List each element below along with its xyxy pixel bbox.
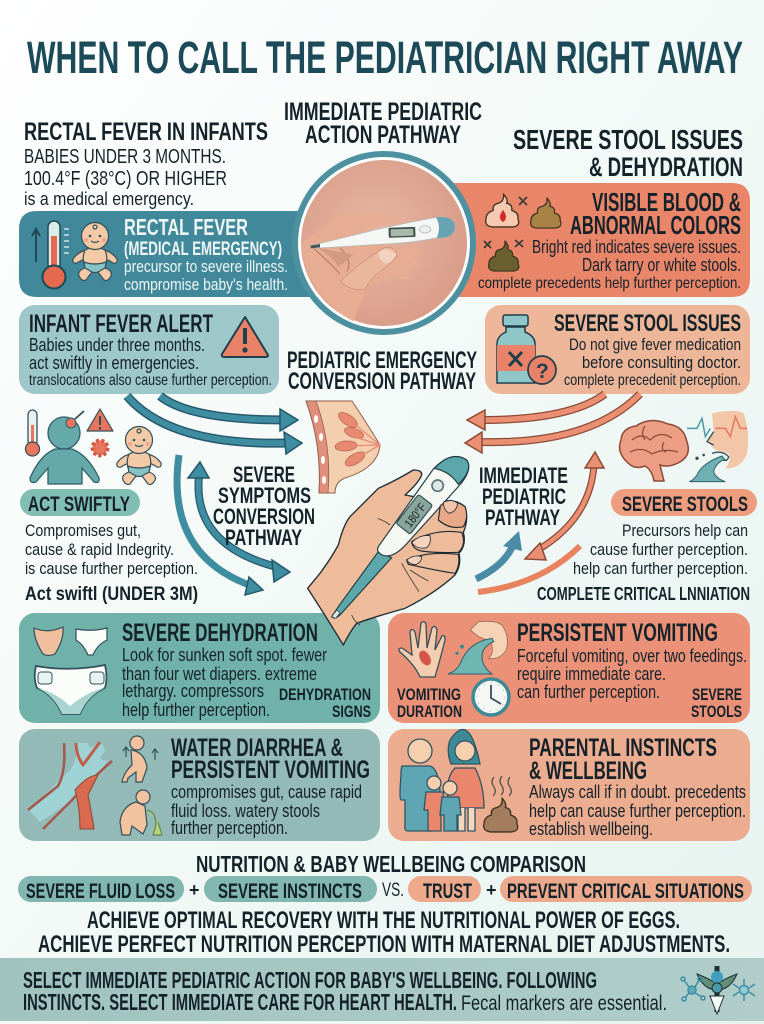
text block: achieve optimal recovery [38, 907, 730, 958]
icon: family [400, 730, 484, 831]
icon: brain [620, 420, 688, 481]
label: vomiting duration: DURATION [397, 702, 462, 721]
panel text [122, 619, 327, 720]
icon: baby [73, 222, 117, 280]
text block: act swiftly details [25, 521, 198, 605]
panel text: WATER DIARRHEA & [171, 734, 343, 762]
panel: persistent vomiting [388, 613, 750, 723]
icon: clock [473, 679, 509, 715]
illustration: hand holding digital thermometer [308, 456, 469, 645]
panel text: compromises gut, cause rapid [171, 782, 362, 802]
footer text: Fecal markers are essential. [461, 992, 667, 1015]
panel text: INFANT FEVER ALERT [29, 310, 213, 338]
heading: immediate pediatric pathway: PATHWAY [485, 505, 560, 530]
icon: medicine bottle with question mark [497, 315, 556, 384]
panel text: than four wet diapers. extreme [122, 664, 317, 684]
panel text: act swiftly in emergencies. [29, 353, 199, 373]
text block: severe stools details [537, 521, 750, 604]
heading: immediate pediatric action pathway: IMMEDIATE PEDIATRIC [284, 98, 482, 126]
label: dehydration signs [279, 685, 371, 721]
panel: parental instincts and wellbeing [388, 729, 750, 841]
panel text: precursor to severe illness. [124, 257, 288, 276]
panel text: can further perception. [517, 682, 660, 702]
panel: severe stool issues [485, 305, 750, 394]
panel text: before consulting doctor. [582, 353, 741, 372]
heading: severe symptoms conversion pathway [213, 462, 315, 550]
heading: immediate pediatric pathway: IMMEDIATE [479, 463, 568, 488]
panel text [171, 734, 370, 838]
panel text: help further perception. [122, 700, 270, 720]
text block: act swiftly details: Compromises gut, [25, 521, 141, 540]
label: severe stools: STOOLS [691, 702, 742, 721]
heading: severe symptoms conversion pathway: SEVERE [233, 462, 295, 487]
icon: crawling figure [122, 736, 158, 782]
text block: act swiftly details: is cause further perception. [25, 559, 198, 578]
comparison pills: + [189, 880, 200, 900]
text block: act swiftly details: cause & rapid Indegrity. [25, 540, 174, 559]
panel text: further perception. [171, 818, 288, 838]
heading: pediatric emergency conversion pathway: PEDIATRIC EMERGENCY [287, 347, 477, 374]
pill: severe fluid loss [18, 876, 184, 903]
footer text: INSTINCTS. SELECT IMMEDIATE CARE FOR HEART HEALTH. [23, 989, 457, 1015]
panel text [29, 310, 272, 389]
arrows: coral pathway arrows [465, 394, 640, 592]
footer text [23, 967, 667, 1015]
label: dehydration signs: SIGNS [332, 702, 371, 721]
panel: water diarrhea and persistent vomiting [19, 729, 380, 841]
icons: fever figure with thermometer and warning [26, 409, 113, 484]
label: dehydration signs: DEHYDRATION [279, 685, 371, 704]
label: vomiting duration [397, 685, 462, 721]
label: act swiftly [20, 489, 140, 516]
arrows: teal pathway arrows [127, 396, 302, 595]
icon: baby [117, 426, 161, 484]
label: act swiftly: ACT SWIFTLY [28, 493, 130, 516]
illustration: anatomical diagram [306, 401, 380, 493]
heading: nutrition and baby wellbeing comparison: NUTRITION & BABY WELLBEING COMPARISON [196, 851, 586, 877]
icon: sick crouching figure [120, 790, 162, 835]
panel text [529, 734, 746, 839]
panel text: Babies under three months. [29, 335, 205, 355]
heading: pediatric emergency conversion pathway [287, 347, 477, 395]
label: vomiting duration: VOMITING [397, 685, 461, 704]
panel text [517, 619, 747, 702]
heading: immediate pediatric action pathway [284, 98, 482, 149]
panel text [478, 187, 741, 292]
text block: rectal fever in infants: is a medical emergency. [24, 189, 194, 209]
panel: severe dehydration [19, 613, 380, 723]
panel text: establish wellbeing. [529, 819, 653, 839]
panel text: compromise baby's health. [124, 275, 288, 294]
text block: rectal fever in infants: 100.4°F (38°C) OR HIGHER [24, 168, 227, 190]
icon: medicine bottle with question mark: ? [536, 360, 549, 383]
label: severe stools [691, 685, 742, 721]
heading: immediate pediatric pathway [479, 463, 568, 530]
panel: rectal fever [19, 211, 330, 297]
panel: visible blood and abnormal colors [440, 183, 750, 297]
panel text: PERSISTENT VOMITING [171, 756, 370, 784]
heading: immediate pediatric action pathway: ACTION PATHWAY [305, 121, 461, 149]
panel text: require immediate care. [517, 664, 666, 684]
footer band [0, 958, 764, 1021]
icon: face vomiting [448, 621, 507, 674]
heading: severe stool issues and dehydration [513, 124, 743, 182]
pill: trust: TRUST [423, 880, 472, 903]
illustration: hand holding digital thermometer: 180°F [402, 500, 429, 530]
pill: severe instincts [204, 876, 377, 903]
icon: warning triangle [222, 317, 268, 357]
panel text: (MEDICAL EMERGENCY) [124, 239, 282, 260]
illustration: hand holding thermometer in circle [295, 154, 473, 332]
heading: pediatric emergency conversion pathway: CONVERSION PATHWAY [288, 368, 476, 395]
panel text: fluid loss. watery stools [171, 801, 320, 821]
panel text: & WELLBEING [529, 757, 647, 785]
pill: trust [408, 876, 481, 903]
panel text: translocations also cause further perception. [29, 372, 272, 389]
icon: face vomiting with pulse line [687, 411, 748, 482]
comparison pills: + [486, 880, 497, 900]
panel text: RECTAL FEVER [124, 214, 248, 240]
panel: infant fever alert [19, 305, 279, 394]
icon: stool warning set [484, 194, 561, 271]
panel text: lethargy. compressors [122, 681, 264, 701]
pill: severe fluid loss: SEVERE FLUID LOSS [26, 880, 175, 903]
heading: severe symptoms conversion pathway: CONVERSION [213, 504, 315, 529]
icon: diapers [34, 627, 107, 714]
panel text [124, 214, 288, 294]
text block: rectal fever in infants: RECTAL FEVER IN INFANTS [24, 118, 268, 146]
icon: caduceus with molecules [681, 966, 755, 1014]
heading: immediate pediatric pathway: PEDIATRIC [482, 484, 566, 509]
comparison pills [18, 876, 752, 903]
panel text: SEVERE DEHYDRATION [122, 619, 318, 647]
heading: severe symptoms conversion pathway: PATHWAY [225, 525, 302, 550]
icon: thermometer with up arrow [32, 221, 69, 288]
text block: rectal fever in infants: BABIES UNDER 3 MONTHS. [24, 146, 226, 168]
heading: severe symptoms conversion pathway: SYMPTOMS [218, 483, 311, 508]
pill: severe instincts: SEVERE INSTINCTS [218, 880, 362, 903]
text block: rectal fever in infants [24, 118, 268, 209]
label: severe stools: SEVERE [692, 685, 742, 704]
panel text: Look for sunken soft spot. fewer [122, 645, 327, 665]
panel text [554, 310, 741, 389]
icon: stool with steam [484, 776, 518, 832]
comparison pills: VS. [382, 880, 404, 901]
text block: act swiftly details: Act swiftl (UNDER 3M) [25, 584, 198, 605]
icon: blood vessels [28, 742, 112, 829]
icon: hand [399, 622, 445, 677]
